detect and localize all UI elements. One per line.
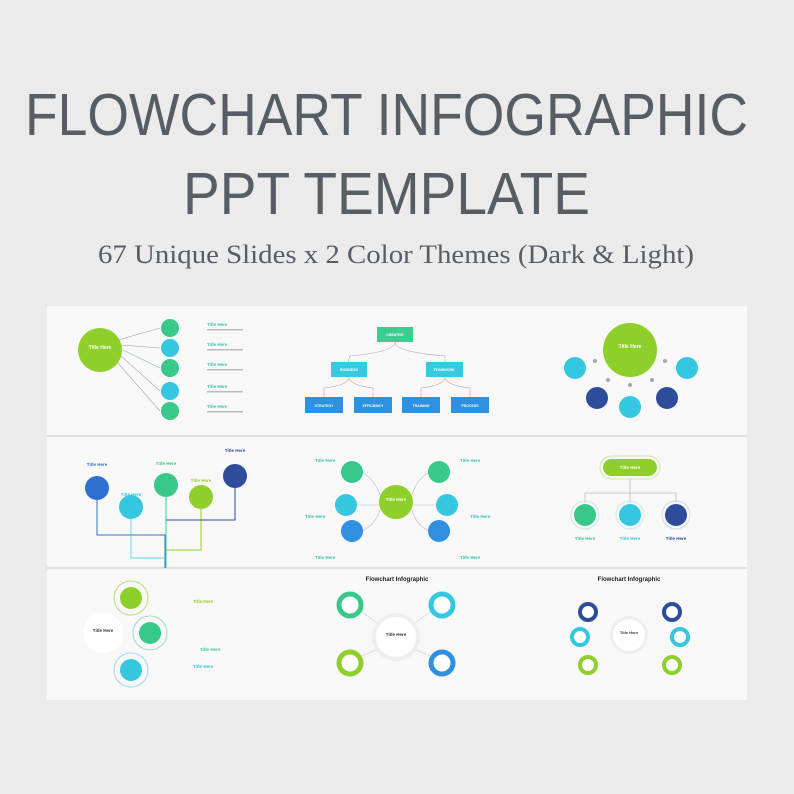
slide: hierarchy [571,456,690,541]
slide: hub with five circles: Title Here [89,345,112,351]
slide: mind map: Title Here [470,514,491,519]
slide: linked rings: Title Here [193,599,214,604]
slide: org chart: EFFICIENCY [363,404,384,408]
slide: mind map: Title Here [315,555,336,560]
slide: tree: Title Here [225,448,246,453]
slide: org chart: TRAINING [413,404,430,408]
slide: tree: Title Here [156,461,177,466]
slide: org chart: STRATEGY [315,404,334,408]
slide: six ring flowchart: Flowchart Infographic [598,577,661,583]
slide: tree: Title Here [121,492,142,497]
slide: tree [85,448,247,568]
slide: bubble cluster [564,323,698,418]
title: PPT TEMPLATE [183,161,590,227]
slide: hub with five circles: Title Here [207,384,228,389]
slide: four ring flowchart [339,577,453,674]
slide: hub with five circles: Title Here [207,322,228,327]
slide: four ring flowchart: Flowchart Infographic [366,577,429,583]
slide: six ring flowchart [572,577,688,673]
slide: bubble cluster: Title Here [619,344,642,350]
slide: linked rings [83,581,221,687]
slide: org chart: PROCESS [461,404,479,408]
slide: tree: Title Here [191,478,212,483]
slide: linked rings: Title Here [200,647,221,652]
slide: hierarchy: Title Here [620,536,641,541]
slide: linked rings: Title Here [193,664,214,669]
slide: linked rings: Title Here [93,628,114,633]
slide: org chart: CREATIVE [386,333,404,337]
slide: hub with five circles: Title Here [207,342,228,347]
slide: mind map: Title Here [460,458,481,463]
slide: hierarchy: Title Here [620,465,641,470]
slide: hub with five circles: Title Here [207,404,228,409]
slide: tree: Title Here [87,462,108,467]
title [25,82,748,227]
slide: org chart: BUSINESS [340,368,359,372]
slide: mind map: Title Here [460,555,481,560]
slide: org chart [305,327,489,413]
slide: mind map: Title Here [386,497,407,502]
slide: hierarchy: Title Here [666,536,687,541]
slide: mind map [305,458,491,560]
slide: hub with five circles [78,319,243,420]
panel: slide previews [47,306,747,700]
slide: six ring flowchart: Title Here [620,630,639,635]
slide: four ring flowchart: Title Here [386,632,407,637]
subtitle: 67 Unique Slides x 2 Color Themes (Dark & Light) [98,240,694,269]
slide: org chart: TEAMWORK [434,368,455,372]
slide: hub with five circles: Title Here [207,362,228,367]
slide: hierarchy: Title Here [575,536,596,541]
slide: mind map: Title Here [315,458,336,463]
slide: mind map: Title Here [305,514,326,519]
